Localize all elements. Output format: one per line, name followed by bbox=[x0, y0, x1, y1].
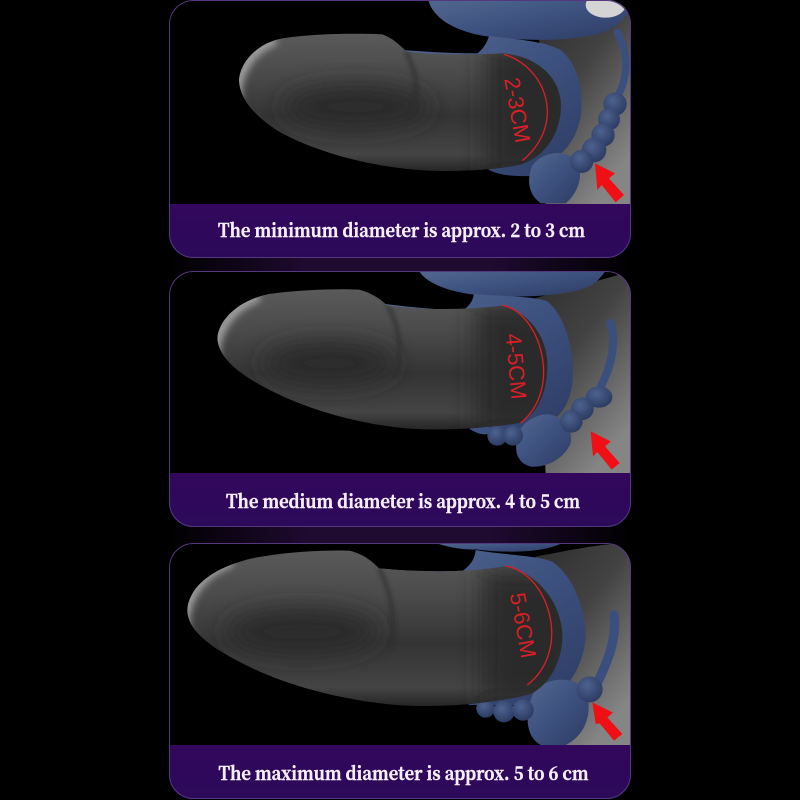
top blue housing bbox=[419, 271, 606, 297]
shaft shading bbox=[215, 296, 576, 435]
lower beads bbox=[476, 699, 534, 722]
glow between panels bbox=[169, 256, 631, 545]
shaft shape bbox=[217, 289, 547, 429]
shaft shape bbox=[187, 551, 562, 706]
caption bar bbox=[169, 745, 631, 799]
white button bbox=[586, 0, 626, 18]
panel: minimum diameter bbox=[169, 0, 631, 258]
arrow bbox=[595, 163, 624, 202]
grey backdrop bbox=[536, 543, 631, 745]
blue ring bbox=[379, 550, 586, 705]
tail with bead bbox=[577, 615, 615, 702]
caption bar bbox=[169, 473, 631, 527]
diameter label: 4-5CM bbox=[501, 332, 531, 400]
arrow bbox=[592, 702, 622, 741]
shaft shading bbox=[237, 40, 586, 177]
caption bar: The minimum diameter is approx. 2 to 3 cm bbox=[218, 216, 585, 243]
panel drawing layer bbox=[215, 271, 631, 473]
top blue housing bbox=[428, 0, 631, 40]
shaft shape bbox=[239, 34, 561, 171]
diameter arc bbox=[504, 54, 547, 161]
beaded tail bbox=[560, 323, 613, 433]
caption bar: The maximum diameter is approx. 5 to 6 cm bbox=[219, 759, 588, 786]
caption bar: The medium diameter is approx. 4 to 5 cm bbox=[226, 487, 580, 514]
ring lobe bbox=[516, 414, 571, 467]
beaded tail bbox=[570, 32, 627, 173]
lower beads bbox=[469, 426, 523, 446]
shaft shading bbox=[185, 562, 582, 703]
diameter arc bbox=[506, 566, 552, 685]
grey backdrop bbox=[539, 0, 631, 204]
blue ring bbox=[402, 36, 581, 176]
panel drawing layer bbox=[237, 0, 631, 204]
diameter label: 5-6CM bbox=[505, 591, 541, 660]
panel: medium diameter bbox=[169, 271, 631, 527]
blue ring bbox=[386, 294, 573, 431]
top blue housing bbox=[439, 544, 560, 552]
panel: maximum diameter bbox=[169, 543, 631, 799]
diameter label: 2-3CM bbox=[499, 75, 535, 145]
arrow bbox=[591, 431, 620, 470]
caption bar bbox=[169, 204, 631, 258]
panel drawing layer bbox=[185, 543, 631, 745]
ring lobe bbox=[528, 680, 589, 745]
grey backdrop bbox=[536, 271, 631, 473]
ring lobe bbox=[529, 153, 580, 203]
diameter arc bbox=[502, 305, 544, 423]
